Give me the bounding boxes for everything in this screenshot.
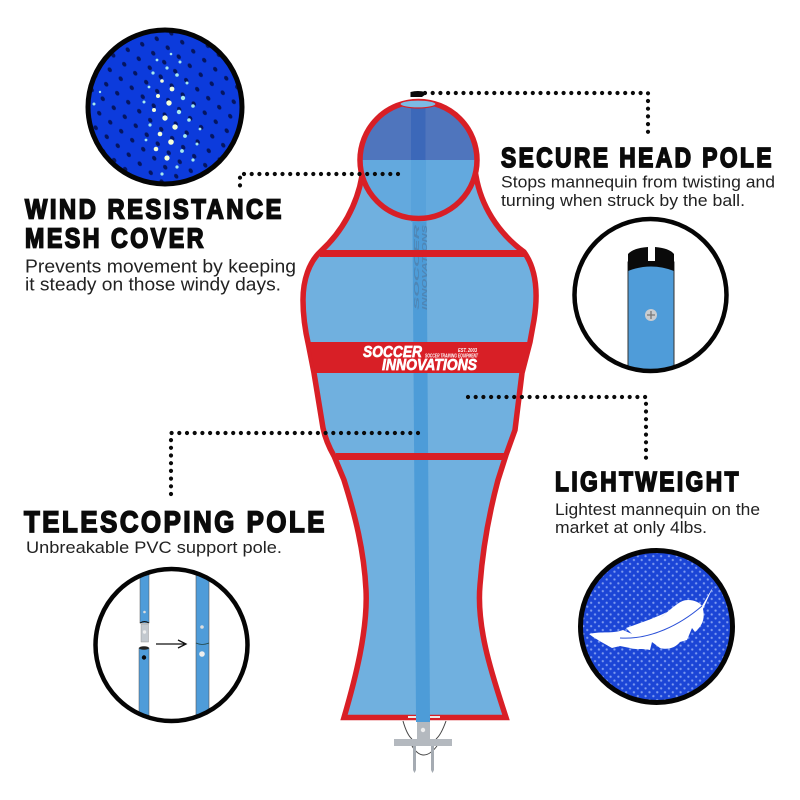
head pole section xyxy=(411,160,426,222)
leader: lightweight xyxy=(468,397,646,460)
description: Prevents movement by keeping xyxy=(25,256,296,276)
description line 2: market at only 4lbs. xyxy=(555,519,707,537)
description: Unbreakable PVC support pole. xyxy=(26,539,282,557)
icon: mesh circle xyxy=(88,30,242,184)
leader: telescoping pole xyxy=(171,433,418,497)
description line 2: turning when struck by the ball. xyxy=(501,192,745,210)
waist seam xyxy=(336,453,505,460)
panel: lightweight xyxy=(555,466,760,704)
pole lettering: SOCCER xyxy=(414,225,421,310)
mannequin body xyxy=(303,176,536,718)
leader: wind resistance xyxy=(240,174,398,190)
pole lettering: INNOVATIONS xyxy=(422,224,429,310)
heading: LIGHTWEIGHT xyxy=(555,466,741,497)
heading line 2: MESH COVER xyxy=(25,222,206,254)
logo: SOCCER xyxy=(363,344,422,361)
ground stake xyxy=(394,716,452,773)
leader: secure head pole xyxy=(425,93,648,133)
red logo band xyxy=(309,342,530,373)
panel: wind resistance mesh cover xyxy=(25,30,296,276)
icon: telescoping circle xyxy=(94,565,250,730)
heading: TELESCOPING POLE xyxy=(24,506,327,539)
head outline xyxy=(360,102,477,218)
description: Lightest mannequin on the xyxy=(555,501,760,519)
icon: feather circle xyxy=(580,550,734,704)
logo: INNOVATIONS xyxy=(382,357,477,374)
panel: telescoping pole xyxy=(24,506,327,730)
logo: SOCCER TRAINING EQUIPMENT xyxy=(425,354,479,360)
head opening xyxy=(400,100,436,108)
panel: secure head pole xyxy=(501,142,775,377)
description line 2: it steady on those windy days. xyxy=(25,274,281,294)
mannequin xyxy=(303,91,536,773)
head pole cap xyxy=(410,91,426,97)
arrow xyxy=(156,640,186,648)
head circle xyxy=(360,102,477,218)
logo xyxy=(363,344,479,374)
heading: WIND RESISTANCE xyxy=(25,194,284,224)
chest seam xyxy=(320,250,526,257)
logo: EST. 2003 xyxy=(458,348,477,354)
head dark upper area xyxy=(362,106,474,160)
support pole xyxy=(412,160,430,718)
description: Stops mannequin from twisting and xyxy=(501,174,775,192)
icon: head pole circle xyxy=(572,217,728,377)
